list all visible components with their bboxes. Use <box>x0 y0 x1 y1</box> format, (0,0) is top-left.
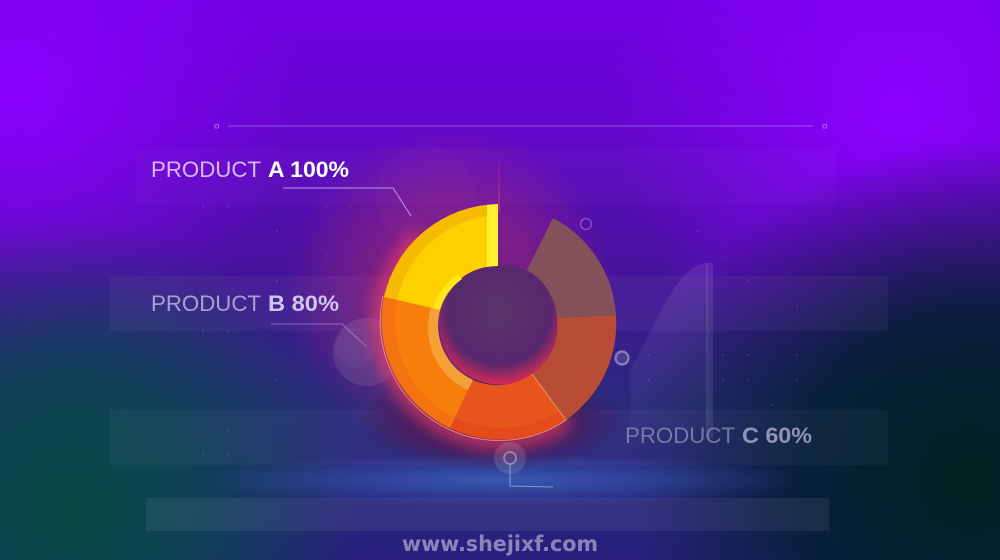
label: product B 80%: B 80% <box>268 291 339 316</box>
segment: product C faded brown <box>527 218 616 318</box>
vertical glow line above ring <box>498 152 500 212</box>
donut chart <box>380 204 616 440</box>
segment: product C rust <box>532 315 616 420</box>
background area chart with vertical marker <box>630 263 713 438</box>
segment: product A/B orange <box>382 297 473 428</box>
label: product C 60%: C 60% <box>742 423 812 448</box>
segment: product A yellow <box>384 204 498 310</box>
rim highlight <box>380 296 566 440</box>
label: product A 100%: A 100% <box>268 157 349 182</box>
donut hole <box>440 264 560 384</box>
label: product B 80%: PRODUCT <box>151 291 261 316</box>
leader line: product B <box>271 324 366 346</box>
dot grid <box>202 205 798 455</box>
ring glow and shadow <box>355 235 625 470</box>
segment: product B red-orange <box>450 374 566 439</box>
label: product C 60%: PRODUCT <box>625 423 735 448</box>
watermark: www.shejixf.com <box>402 532 598 556</box>
small ring markers <box>494 218 628 474</box>
translucent background bands <box>110 148 888 531</box>
label: product A 100%: PRODUCT <box>151 157 261 182</box>
decorative lens circles <box>333 145 475 386</box>
leader line: product A <box>283 188 411 216</box>
leader line: product C <box>510 464 553 487</box>
top rule with end markers <box>215 124 826 128</box>
